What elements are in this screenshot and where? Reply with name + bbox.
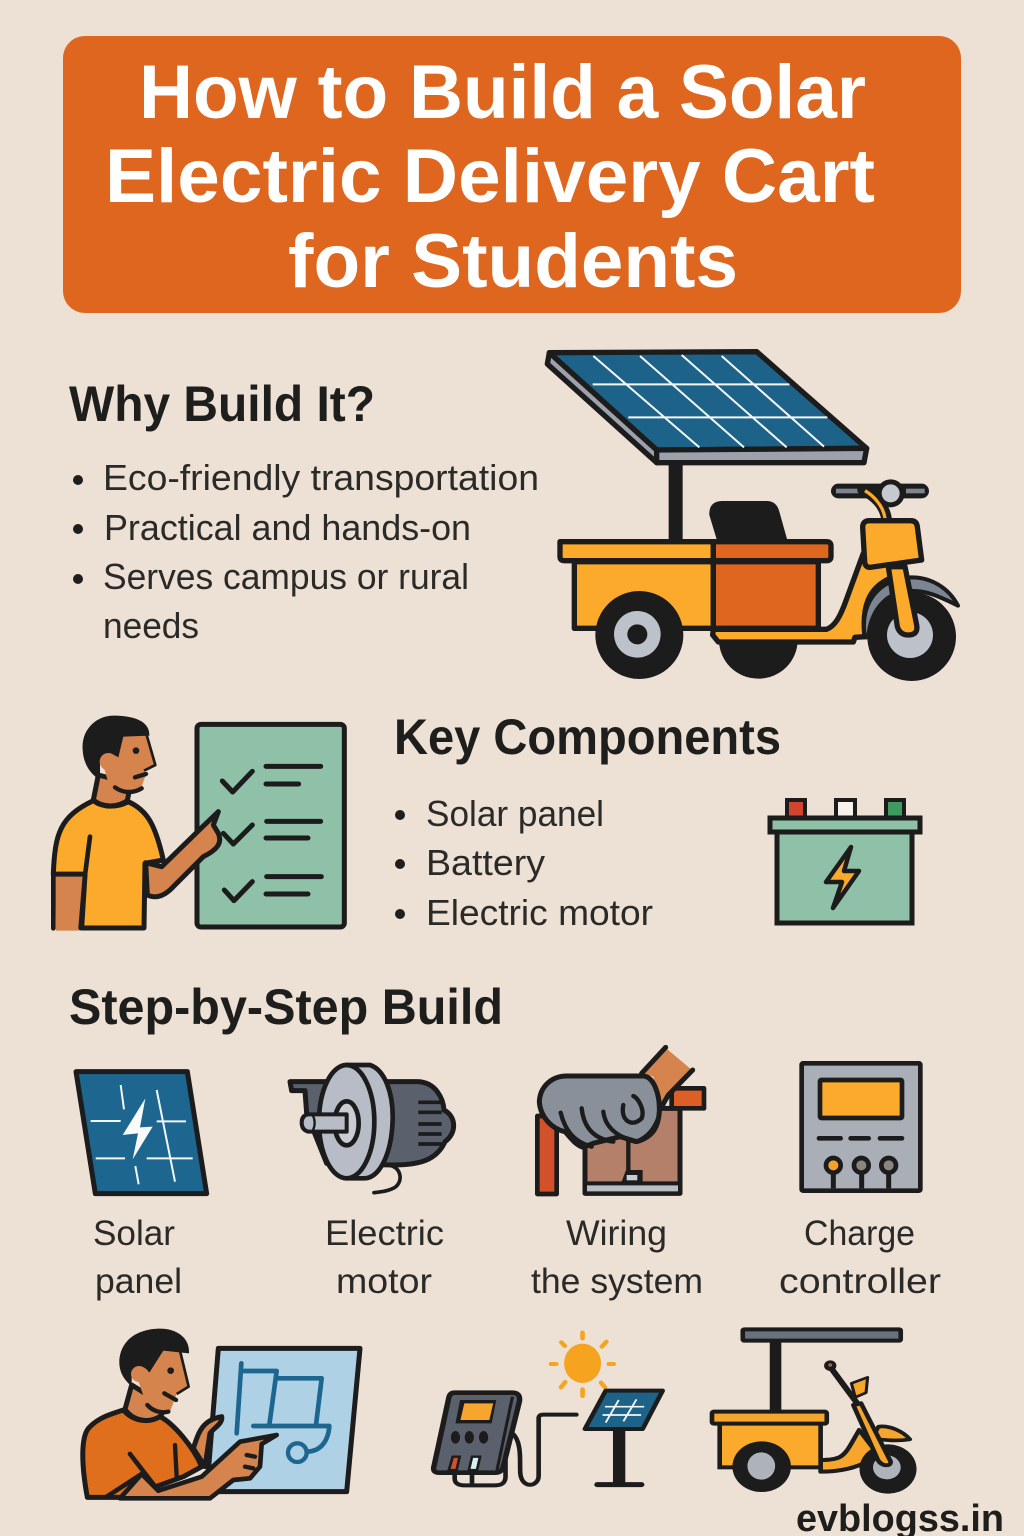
- icon: solar panel: [76, 1072, 207, 1194]
- label: motor: [336, 1262, 432, 1301]
- title banner: for Students: [288, 219, 738, 304]
- label: panel: [95, 1262, 182, 1301]
- panel: key components: [394, 709, 781, 933]
- list: reasons: needs: [103, 605, 199, 646]
- icon: multimeter: [434, 1393, 576, 1485]
- step: electric motor: [290, 1065, 454, 1301]
- label: [531, 1214, 703, 1301]
- label: Wiring: [566, 1214, 667, 1253]
- label: controller: [779, 1262, 941, 1301]
- heading: why build it: Why Build It?: [69, 376, 375, 432]
- illustration: testing with meter and solar panel: [434, 1333, 663, 1485]
- label: Electric: [325, 1214, 444, 1253]
- heading: key components: Key Components: [394, 709, 781, 765]
- label: [325, 1214, 444, 1301]
- person: [53, 716, 220, 931]
- person: [83, 1329, 277, 1498]
- list: components: [395, 793, 653, 933]
- panel: why build it: [69, 376, 539, 646]
- illustration: solar delivery cart: [547, 352, 958, 681]
- blueprint board: [207, 1348, 360, 1492]
- label: [779, 1214, 941, 1301]
- label: [93, 1214, 182, 1301]
- step: charge controller: [779, 1063, 941, 1301]
- label: the system: [531, 1262, 703, 1301]
- list: reasons: Eco-friendly transportation: [103, 457, 539, 498]
- icon: electric motor: [290, 1065, 454, 1193]
- title banner: [63, 36, 961, 313]
- heading: step-by-step build: Step-by-Step Build: [69, 979, 503, 1035]
- illustration: student with checklist: [53, 716, 344, 931]
- step: solar panel: [76, 1072, 207, 1301]
- list: components: Electric motor: [426, 892, 653, 933]
- icon: charge controller: [802, 1063, 920, 1191]
- list: components: Solar panel: [426, 793, 604, 834]
- label: Solar: [93, 1214, 175, 1253]
- title banner: How to Build a Solar: [139, 50, 866, 135]
- title banner: Electric Delivery Cart: [105, 134, 875, 219]
- label: Charge: [804, 1214, 915, 1253]
- icon: sun: [551, 1333, 614, 1396]
- icon: panel on stand: [585, 1391, 663, 1485]
- illustration: finished cart: [712, 1329, 917, 1494]
- illustration: student with blueprint: [83, 1329, 360, 1498]
- list: reasons: [73, 457, 539, 646]
- step: wiring the system: [531, 1047, 704, 1301]
- list: components: Battery: [426, 842, 545, 883]
- list: reasons: Practical and hands-on: [104, 507, 471, 548]
- list: reasons: Serves campus or rural: [103, 556, 469, 597]
- checklist board: [197, 724, 344, 927]
- icon: wiring: [537, 1047, 704, 1194]
- icon: battery: [770, 800, 920, 923]
